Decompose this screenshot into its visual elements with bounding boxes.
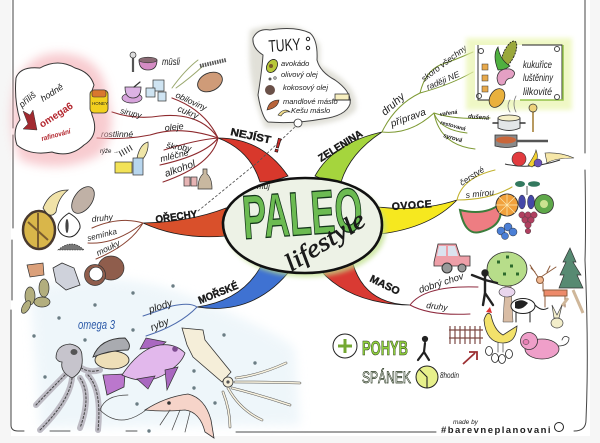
MOŘSKÉ branch labels: ryby — [149, 316, 172, 334]
ZELENINA branch labels — [379, 42, 490, 144]
ZELENINA branch labels: raději NE — [425, 69, 461, 92]
branch label: ZELENINA: ZELENINA — [316, 128, 365, 165]
MOŘSKÉ branch labels — [147, 298, 175, 334]
OŘECHY sub-branches — [88, 220, 143, 259]
icon: fence — [449, 326, 483, 344]
panel: TUKY fats boot: olivový olej — [281, 70, 318, 79]
branch: MASO red — [320, 264, 410, 305]
panel: TUKY fats boot: TUKY — [268, 35, 301, 56]
OŘECHY branch labels: druhy — [91, 212, 114, 224]
icon: tea cup — [122, 82, 142, 103]
icon: rice, cheese, milk and flour — [100, 142, 148, 175]
note: corn, legumes, nightshades: lilkovité — [523, 87, 552, 98]
icon: coconut — [84, 256, 124, 286]
MASO sub-branches — [410, 287, 478, 314]
icon: wooden spoon — [529, 104, 537, 132]
icon: deer — [530, 265, 567, 307]
note: corn, legumes, nightshades: luštěniny — [523, 73, 554, 84]
icon: honey jar — [90, 90, 108, 113]
note: corn, legumes, nightshades: kukuřice — [523, 60, 552, 71]
text: müsli: müsli — [162, 57, 181, 68]
icon: clock — [416, 366, 438, 388]
text: SPÁNEK: SPÁNEK — [362, 368, 411, 387]
NEJÍST branch labels: alkohol — [163, 158, 198, 180]
icon: walking figure — [418, 337, 429, 360]
NEJÍST branch labels — [101, 90, 209, 180]
icon: pot with steam — [493, 96, 525, 130]
plus icon in circle — [333, 334, 357, 358]
MASO branch labels: druhy — [426, 300, 449, 313]
text: 8 hodin: 8hodin — [440, 371, 459, 380]
icon: octopus — [36, 344, 100, 430]
NEJÍST branch labels: rostlinné — [101, 129, 133, 139]
OŘECHY branch labels: semínka — [86, 227, 118, 243]
MASO branch labels: dobrý chov — [418, 271, 466, 296]
ZELENINA branch labels: dušená — [468, 114, 490, 122]
credit: made by #barevneplanovani: made by — [453, 419, 479, 426]
text: omega 3: omega 3 — [78, 317, 116, 332]
branch label: OVOCE: OVOCE — [391, 198, 432, 213]
central node: můj PALEO lifestyle — [223, 176, 386, 277]
ZELENINA sub-branches — [382, 52, 490, 149]
icon: rice, cheese, milk and flour: rýže → — [100, 149, 119, 155]
icon: eggs — [486, 346, 512, 364]
icon: rabbit — [551, 305, 563, 328]
NEJÍST branch labels: mléčné — [159, 147, 190, 164]
NEJÍST branch labels: cukry — [176, 104, 200, 121]
icon: hazelnut — [58, 213, 80, 237]
central node: můj PALEO lifestyle: můj — [257, 182, 270, 191]
branch label: MASO: MASO — [368, 273, 402, 298]
branch: ZELENINA green — [315, 132, 382, 182]
ZELENINA branch labels: vařená — [439, 110, 458, 118]
panel: TUKY fats boot: avokádo — [281, 59, 309, 68]
omega 6 warning cloud: hodně — [39, 82, 65, 104]
MASO branch labels — [418, 271, 466, 313]
omega 6 warning cloud — [12, 53, 112, 166]
ZELENINA branch labels: druhy — [379, 90, 409, 118]
MOŘSKÉ branch labels: plody — [147, 298, 175, 316]
branch label: MOŘSKÉ: MOŘSKÉ — [196, 279, 240, 307]
NEJÍST branch labels: sirupy — [120, 106, 143, 120]
icon: cow — [499, 287, 548, 322]
ZELENINA branch labels: skoro všechny — [419, 42, 469, 84]
icon: fruit plate — [505, 150, 574, 167]
icon: wheat — [172, 60, 226, 88]
icon: glasses and bottle — [184, 169, 212, 189]
icon: honey jar: HONEY — [92, 101, 108, 106]
panel: TUKY fats boot: mandlové máslo — [283, 97, 338, 106]
note: corn, legumes, nightshades — [466, 38, 572, 110]
icon: pistachios — [19, 279, 50, 315]
icon: seeds — [58, 244, 84, 250]
icon: mussel — [93, 338, 129, 369]
ZELENINA branch labels: syrová — [442, 133, 463, 144]
icon: bread — [194, 68, 226, 96]
icon: pig — [520, 332, 569, 359]
icon: almond — [67, 183, 99, 217]
icon: rooster — [484, 307, 517, 352]
ocean bubbles — [32, 284, 257, 433]
icon: brazil nut shards — [53, 263, 80, 290]
exclamation mark: ! — [272, 135, 284, 158]
icon: shrimp — [100, 394, 214, 438]
icon: muesli bowl and spoon — [130, 52, 157, 72]
panel: TUKY fats boot: kokosový olej — [283, 83, 328, 92]
credit: made by #barevneplanovani: #barevneplanovani — [441, 425, 551, 436]
panel: TUKY fats boot: Kešu máslo — [291, 106, 330, 115]
icon: tree — [487, 252, 527, 322]
branch label: OŘECHY: OŘECHY — [155, 207, 198, 226]
text: POHYB: POHYB — [362, 338, 408, 360]
arrow to the farm — [463, 352, 477, 364]
ZELENINA branch labels: restovaná — [439, 120, 466, 133]
central node: můj PALEO lifestyle: PALEO — [240, 176, 365, 253]
ZELENINA branch labels: příprava — [388, 107, 428, 130]
MOŘSKÉ sub-branches — [143, 304, 197, 336]
ocean wash background — [30, 278, 300, 428]
omega 6 warning cloud: rafinování — [41, 128, 72, 143]
NEJÍST sub-branches — [97, 98, 218, 182]
icon: walnut — [23, 211, 55, 249]
panel: TUKY fats boot — [249, 25, 356, 128]
icon: sugar cubes — [146, 80, 166, 101]
branch label: NEJÍST: NEJÍST — [229, 125, 273, 147]
icon: cashew — [43, 190, 68, 215]
NEJÍST branch labels: oleje — [164, 121, 184, 133]
OVOCE branch labels: s mírou — [465, 187, 495, 200]
OVOCE branch labels: čerstvé — [458, 164, 486, 188]
branch: NEJÍST red — [218, 138, 288, 182]
omega 6 warning cloud: omega6 — [38, 100, 76, 131]
branch: MOŘSKÉ blue — [197, 262, 292, 308]
icon: fruit — [460, 181, 554, 240]
OŘECHY branch labels — [86, 212, 122, 258]
omega 6 warning cloud: příliš — [16, 89, 38, 110]
icon: farmer — [472, 270, 497, 305]
icon: pine tree — [559, 248, 583, 313]
icon: frying pan — [495, 135, 548, 148]
icon: car — [434, 244, 470, 273]
central node: můj PALEO lifestyle: lifestyle — [280, 206, 371, 277]
OŘECHY branch labels: mouky — [94, 238, 122, 258]
icon: pecan — [27, 263, 44, 277]
NEJÍST branch labels: škroby — [166, 140, 193, 154]
OVOCE sub-branches — [457, 170, 512, 200]
branch: OVOCE yellow — [378, 200, 457, 234]
OVOCE branch labels — [458, 164, 495, 200]
branch: OŘECHY orange — [143, 208, 226, 237]
icon: squid — [182, 328, 300, 427]
credit: made by #barevneplanovani — [441, 419, 564, 436]
icon: fish — [103, 338, 185, 395]
NEJÍST branch labels: obiloviny — [174, 90, 209, 113]
dotted link from TUKY to OŘECHY — [198, 124, 298, 211]
